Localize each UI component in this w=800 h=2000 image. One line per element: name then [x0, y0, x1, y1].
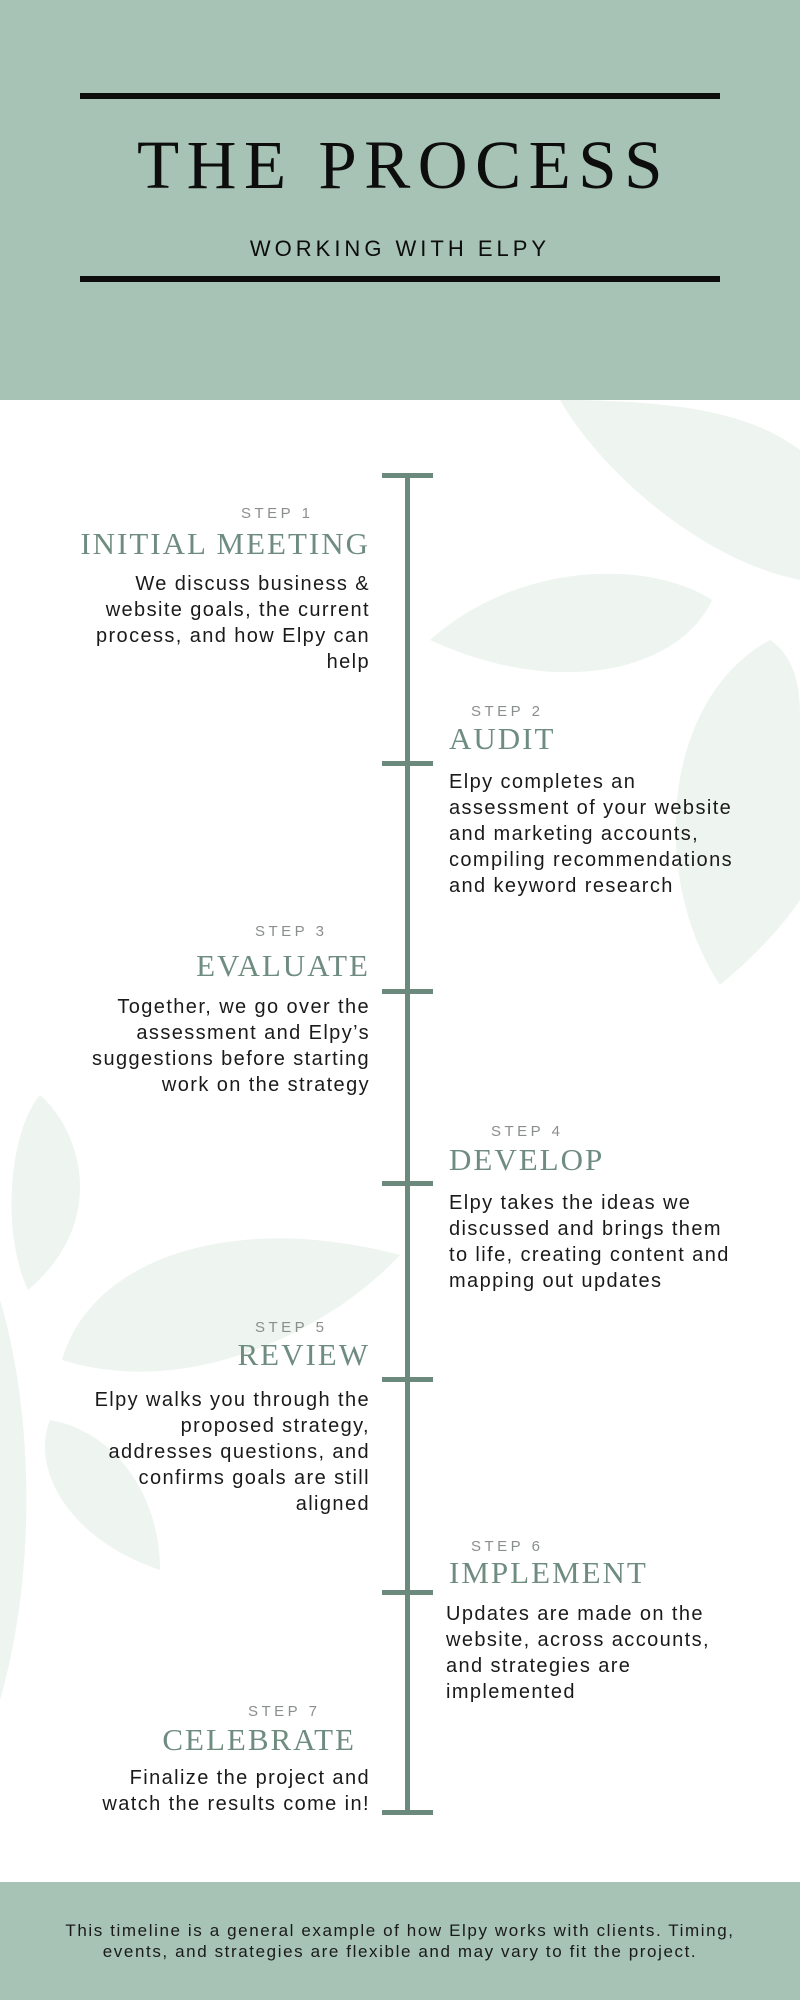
step 3: EVALUATE [196, 948, 370, 983]
timeline [382, 473, 433, 1815]
step 6: implemented [446, 1681, 576, 1703]
step 4: STEP 4 [491, 1123, 563, 1140]
step 1: website goals, the current [106, 599, 370, 621]
step 4: mapping out updates [449, 1270, 662, 1292]
step 4: DEVELOP [449, 1142, 604, 1177]
step 1 [80, 505, 370, 673]
step 7 [102, 1703, 370, 1815]
step 1: help [327, 651, 370, 673]
header bottom rule [80, 276, 720, 282]
step 1: INITIAL MEETING [80, 526, 370, 561]
step 5: STEP 5 [255, 1319, 327, 1336]
step 5 [95, 1319, 370, 1515]
step 4: to life, creating content and [449, 1244, 730, 1266]
step 6: Updates are made on the [446, 1603, 704, 1625]
footer band [0, 1882, 800, 2000]
footer note: This timeline is a general example of how Elpy works with clients. Timing, [65, 1921, 735, 1940]
step 5: confirms goals are still [139, 1467, 370, 1489]
step 5: Elpy walks you through the [95, 1389, 370, 1411]
step 1: process, and how Elpy can [96, 625, 370, 647]
step 4 [449, 1123, 730, 1292]
step 6: IMPLEMENT [449, 1555, 648, 1590]
step 3 [92, 923, 370, 1096]
step 2: Elpy completes an [449, 771, 636, 793]
step 2: compiling recommendations [449, 849, 733, 871]
step 6: website, across accounts, [446, 1629, 710, 1651]
step 1: We discuss business & [135, 573, 370, 595]
step 3: Together, we go over the [117, 996, 370, 1018]
step 5: addresses questions, and [108, 1441, 370, 1463]
subtitle: WORKING WITH ELPY [250, 236, 550, 261]
step 2 [449, 703, 733, 897]
step 1: STEP 1 [241, 505, 313, 522]
step 3: suggestions before starting [92, 1048, 370, 1070]
step 4: Elpy takes the ideas we [449, 1192, 691, 1214]
step 2: STEP 2 [471, 703, 543, 720]
step 2: assessment of your website [449, 797, 732, 819]
header top rule [80, 93, 720, 99]
footer note [65, 1921, 735, 1961]
step 3: assessment and Elpy’s [136, 1022, 370, 1044]
step 5: REVIEW [237, 1337, 370, 1372]
step 6 [446, 1538, 710, 1703]
step 4: discussed and brings them [449, 1218, 722, 1240]
step 2: AUDIT [449, 721, 555, 756]
title: THE PROCESS [137, 127, 670, 203]
step 6: and strategies are [446, 1655, 631, 1677]
step 3: STEP 3 [255, 923, 327, 940]
step 7: Finalize the project and [130, 1767, 370, 1789]
step 2: and keyword research [449, 875, 674, 897]
background leaves [0, 400, 800, 1699]
step 7: watch the results come in! [102, 1793, 370, 1815]
step 6: STEP 6 [471, 1538, 543, 1555]
footer note: events, and strategies are flexible and may vary to fit the project. [103, 1942, 697, 1961]
step 7: CELEBRATE [162, 1722, 356, 1757]
step 3: work on the strategy [162, 1074, 370, 1096]
step 5: proposed strategy, [181, 1415, 370, 1437]
step 2: and marketing accounts, [449, 823, 699, 845]
step 7: STEP 7 [248, 1703, 320, 1720]
header band [0, 0, 800, 400]
step 5: aligned [296, 1493, 370, 1515]
